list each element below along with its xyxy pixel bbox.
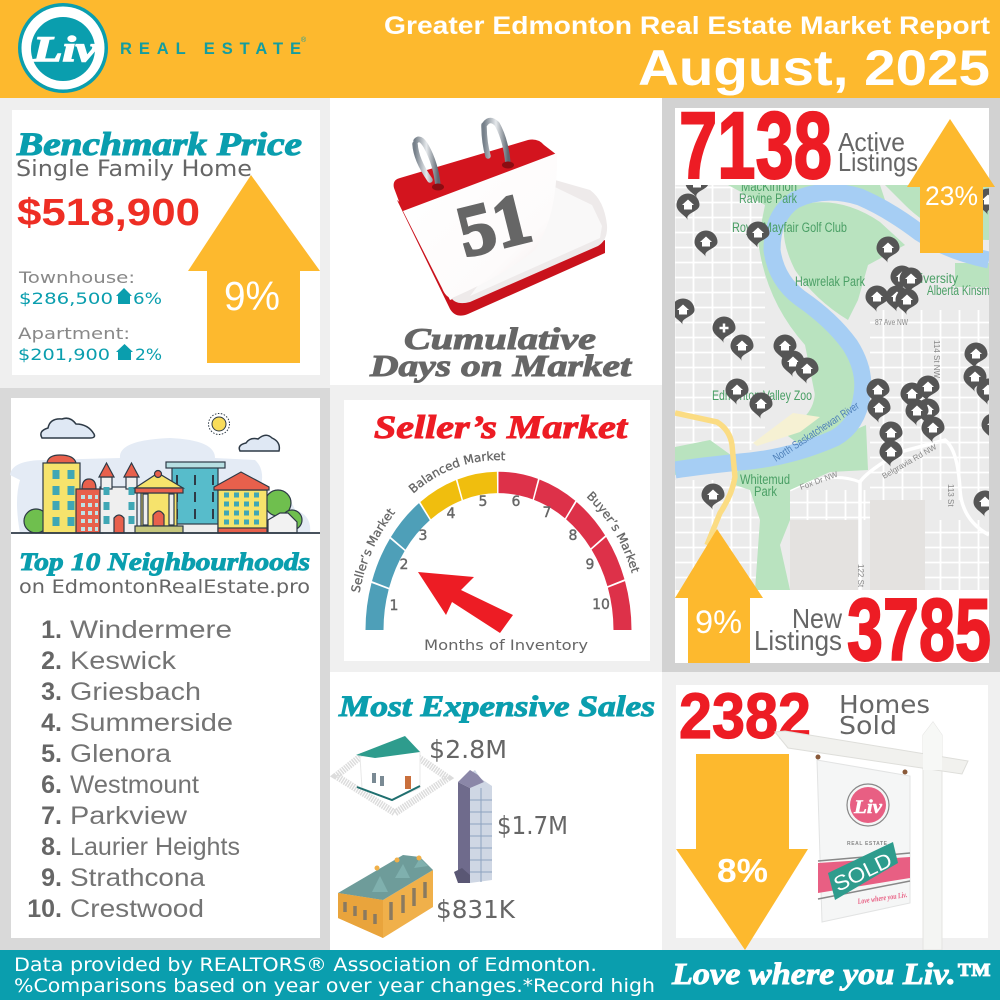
map place labels: Fox Dr NW	[799, 470, 839, 492]
map place labels: Belgravia Rd NW	[880, 442, 939, 481]
subheading: single family home: Single Family Home	[16, 157, 252, 182]
map place labels	[712, 179, 990, 603]
apartment price: Apartment:	[18, 324, 130, 343]
tagline: Love where you Liv.™	[671, 956, 990, 991]
heading: top 10 neighbourhoods: Top 10 Neighbourhoods	[19, 549, 310, 576]
homes sold label	[839, 690, 930, 740]
homes sold number: 2382	[679, 680, 811, 752]
icon: for sale sign with sold rider: REAL ESTATE	[847, 841, 888, 847]
map place labels: 87 Ave NW	[875, 318, 908, 327]
gauge numbers: 2	[400, 557, 408, 573]
arrow up: 9% new listings: 9%	[695, 604, 742, 640]
neighbourhood list: Laurier Heights	[70, 833, 240, 861]
townhouse price: 6%	[133, 289, 162, 308]
neighbourhood list: 6.	[41, 771, 62, 799]
townhouse price: $286,500	[19, 289, 113, 308]
map place labels: University	[905, 271, 958, 286]
neighbourhood list: Windermere	[70, 616, 232, 644]
panel: most expensive sales	[330, 672, 662, 950]
neighbourhood list: Summerside	[70, 709, 233, 737]
heading: cumulative days on market: Days on Market	[369, 348, 633, 383]
value: house sale: $2.8M	[429, 735, 507, 764]
heading: seller's market: Seller’s Market	[374, 410, 628, 446]
neighbourhood list: 5.	[41, 740, 62, 768]
neighbourhood list: 7.	[41, 802, 62, 830]
data source note: Data provided by REALTORS® Association of Edmonton.	[14, 954, 597, 976]
icon: house	[336, 736, 448, 813]
neighbourhood list: 1.	[41, 616, 62, 644]
heading: cumulative days on market: Cumulative	[404, 321, 596, 356]
icon: for sale sign with sold rider: SOLD	[830, 849, 896, 896]
value: townhouse sale: $831K	[436, 895, 516, 924]
report title: Greater Edmonton Real Estate Market Report	[384, 12, 991, 40]
map	[675, 185, 989, 590]
icon: townhouses	[338, 855, 433, 938]
new listings label: New	[792, 603, 843, 634]
gauge labels	[351, 451, 640, 592]
gauge numbers: 8	[569, 528, 577, 544]
panel: benchmark price	[0, 98, 330, 388]
neighbourhood list: Glenora	[70, 740, 171, 768]
header banner	[0, 0, 1000, 98]
panel: top 10 neighbourhoods	[0, 388, 330, 950]
arrow up: 9% new listings	[675, 529, 763, 663]
arrow down: 8%: 8%	[717, 852, 768, 889]
gauge labels: Seller’s Market	[351, 508, 396, 592]
map place labels: Royal Mayfair Golf Club	[732, 220, 847, 235]
neighbourhood list: Keswick	[70, 647, 177, 675]
panel: cumulative days on market	[330, 98, 662, 385]
icon: for sale sign with sold rider	[775, 722, 968, 950]
arrow down: 8%	[676, 754, 808, 950]
gauge numbers: 5	[479, 494, 487, 510]
active listings number: 7138	[679, 93, 832, 199]
map place labels: North Saskatchewan River	[771, 400, 862, 465]
arrow: gauge pointer at 2 months	[418, 572, 513, 633]
neighbourhood list: Westmount	[70, 771, 199, 799]
homes sold label: Sold	[839, 711, 897, 740]
gauge numbers: 7	[543, 505, 551, 521]
arrow up: 23%: 23%	[925, 181, 978, 211]
logo: Liv Real Estate: REAL ESTATE	[120, 40, 301, 58]
heading: benchmark price: Benchmark Price	[16, 127, 302, 163]
apartment price: 2%	[135, 345, 162, 364]
map place labels: Park	[754, 484, 777, 499]
heading: most expensive sales: Most Expensive Sales	[338, 690, 655, 723]
arrow up: 9%	[188, 175, 320, 363]
homes sold label: Homes	[839, 690, 930, 719]
logo: Liv Real Estate: ®	[301, 36, 307, 44]
neighbourhood list: 9.	[41, 864, 62, 892]
map place labels: 114 St NW	[932, 340, 941, 379]
gauge numbers: 6	[512, 494, 521, 510]
gauge numbers: 4	[447, 506, 456, 522]
neighbourhood list: Griesbach	[70, 678, 201, 706]
neighbourhood list: 8.	[41, 833, 62, 861]
map place labels: Ravine Park	[739, 191, 797, 206]
data source note: %Comparisons based on year over year changes.*Record high	[14, 975, 655, 997]
report date: August, 2025	[638, 40, 990, 96]
arrow up: 23%	[907, 119, 995, 253]
map place labels: MacKinnon	[741, 179, 797, 194]
map place labels: Whitemud	[740, 472, 790, 487]
icon: calendar	[394, 120, 607, 316]
gauge numbers: 3	[419, 528, 427, 544]
data source note	[14, 954, 655, 997]
map place labels: Edmonton Valley Zoo	[712, 388, 812, 403]
map place labels: 122 St NW	[856, 564, 865, 603]
arrow up: 9%: 9%	[224, 273, 280, 319]
new listings footer strip: Listings	[754, 625, 842, 656]
neighbourhood list: Parkview	[70, 802, 188, 830]
icon: for sale sign with sold rider: Love where you Liv.	[856, 890, 908, 906]
price value: $518,900	[17, 192, 200, 234]
neighbourhood list: 3.	[41, 678, 62, 706]
active listings header strip: Listings	[838, 147, 918, 177]
label: months of inventory: Months of Inventory	[424, 638, 588, 654]
neighbourhood list	[27, 616, 240, 923]
gauge labels: Buyer’s Market	[586, 491, 640, 574]
active listings label: Active	[838, 127, 905, 157]
illustration: city skyline	[10, 414, 320, 533]
gauge numbers: 1	[390, 598, 398, 614]
logo: Liv Real Estate	[18, 3, 307, 93]
calendar number: 51	[449, 177, 539, 273]
active listings header strip	[675, 93, 989, 199]
apartment price: $201,900	[18, 345, 110, 364]
panel: seller's market gauge	[330, 385, 662, 672]
townhouse price	[18, 268, 162, 308]
gauge labels: Balanced Market	[408, 451, 506, 494]
neighbourhood list: Strathcona	[70, 864, 205, 892]
new listings footer strip	[675, 580, 991, 679]
map listing pins	[672, 172, 1000, 517]
neighbourhood list: 2.	[41, 647, 62, 675]
gauge numbers	[390, 494, 610, 614]
logo: Liv Real Estate: Liv	[32, 29, 98, 69]
footer banner	[0, 950, 1000, 1000]
value: tower sale: $1.7M	[497, 811, 568, 840]
neighbourhood list: 4.	[41, 709, 62, 737]
map place labels: Hawrelak Park	[795, 274, 865, 289]
panel: listings map	[662, 93, 1000, 679]
map place labels: 113 St	[946, 484, 955, 507]
panel: homes sold	[662, 672, 1000, 950]
gauge arc	[374, 482, 622, 630]
townhouse price: Townhouse:	[18, 268, 135, 287]
icon: for sale sign with sold rider: Liv	[853, 797, 883, 818]
gauge numbers: 10	[592, 597, 610, 613]
neighbourhood list: 10.	[27, 895, 62, 923]
subheading: website: on EdmontonRealEstate.pro	[19, 576, 310, 598]
gauge numbers: 9	[586, 557, 594, 573]
heading: cumulative days on market	[369, 321, 633, 383]
icon: tower	[454, 770, 492, 883]
apartment price	[18, 324, 162, 364]
neighbourhood list: Crestwood	[70, 895, 204, 923]
